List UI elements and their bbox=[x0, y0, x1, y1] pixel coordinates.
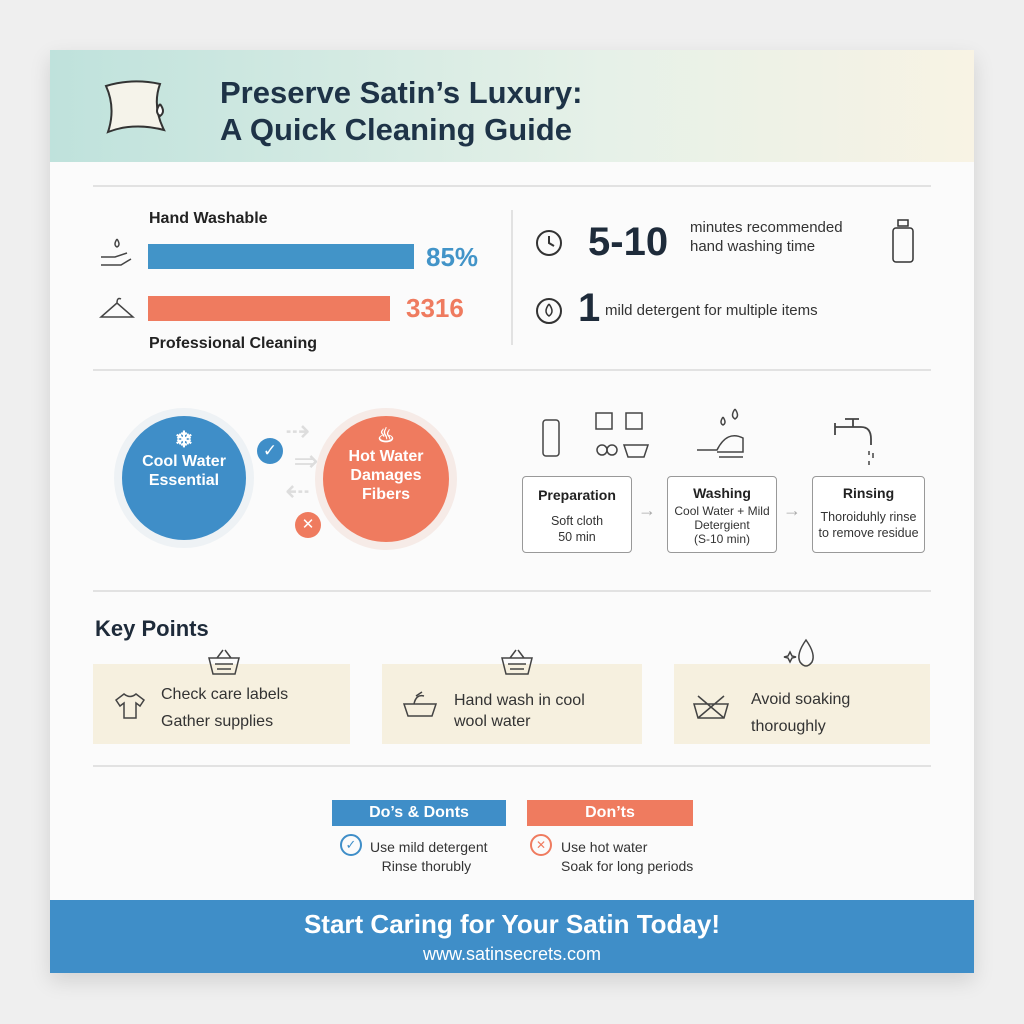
key point 1: Gather supplies bbox=[161, 713, 273, 730]
icon: satin cloth bbox=[104, 80, 166, 134]
icon: bottle bbox=[892, 219, 914, 263]
stats: bars: Hand Washable bbox=[149, 210, 268, 227]
heading: key points: Key Points bbox=[95, 616, 209, 641]
process steps: → bbox=[783, 500, 801, 520]
footer: www.satinsecrets.com bbox=[423, 944, 601, 964]
comparison circles bbox=[114, 408, 457, 550]
step: preparation bbox=[522, 476, 632, 553]
icon: drop bbox=[536, 298, 562, 324]
dos bbox=[332, 800, 506, 874]
header band bbox=[50, 50, 974, 162]
step: rinsing: Thoroiduhly rinse bbox=[821, 510, 916, 524]
stats: numbers bbox=[536, 219, 914, 330]
step: washing: (S-10 min) bbox=[694, 532, 750, 546]
step: rinsing bbox=[812, 476, 925, 553]
stats: bars bbox=[99, 210, 478, 352]
key point 3: Avoid soaking bbox=[751, 691, 850, 708]
dos: Rinse thorubly bbox=[382, 858, 471, 874]
process steps bbox=[522, 408, 925, 553]
key point 3 bbox=[674, 664, 930, 744]
stats: numbers: 1 bbox=[578, 286, 600, 330]
arrows: ⇢ bbox=[285, 415, 310, 448]
icon: x: ✕ bbox=[302, 516, 314, 533]
donts: Use hot water bbox=[561, 839, 647, 855]
arrows: ⇠ bbox=[285, 475, 310, 508]
icon: check: ✓ bbox=[263, 441, 277, 460]
dos: ✓ bbox=[346, 837, 356, 852]
comparison circles: Essential bbox=[149, 472, 219, 489]
stats: numbers: minutes recommended bbox=[690, 219, 843, 236]
footer bbox=[50, 900, 974, 973]
circle: cool water bbox=[114, 408, 254, 548]
process steps: → bbox=[638, 500, 656, 520]
comparison circles: Damages bbox=[350, 467, 422, 484]
donts: Don’ts bbox=[585, 804, 635, 821]
stats: bars: Professional Cleaning bbox=[149, 335, 317, 352]
circle: hot water bbox=[315, 408, 457, 550]
title: A Quick Cleaning Guide bbox=[220, 112, 572, 147]
icon: hanger bbox=[99, 298, 135, 318]
donts bbox=[527, 800, 693, 874]
dos: Do’s & Donts bbox=[369, 804, 469, 821]
key point 2 bbox=[382, 664, 642, 744]
icon: x bbox=[295, 512, 321, 538]
key point 2: Hand wash in cool bbox=[454, 692, 585, 709]
step: rinsing: Rinsing bbox=[843, 485, 894, 501]
step: rinsing: to remove residue bbox=[818, 526, 919, 540]
stats: bars: 3316 bbox=[406, 293, 464, 323]
donts: ✕ bbox=[536, 838, 546, 852]
step: preparation: 50 min bbox=[558, 530, 596, 544]
comparison circles: Fibers bbox=[362, 486, 410, 503]
icons: preparation bbox=[542, 412, 649, 458]
donts: Soak for long periods bbox=[561, 858, 693, 874]
icon: check bbox=[257, 438, 283, 464]
comparison circles: Hot Water bbox=[349, 448, 423, 465]
key point 1: Check care labels bbox=[161, 686, 288, 703]
step: washing: Cool Water + Mild bbox=[674, 504, 770, 518]
comparison circles: Cool Water bbox=[142, 453, 226, 470]
step: preparation: Soft cloth bbox=[551, 514, 603, 528]
stats: numbers: mild detergent for multiple items bbox=[605, 302, 818, 319]
key point 3: thoroughly bbox=[751, 718, 826, 735]
step: washing: Detergient bbox=[694, 518, 750, 532]
step: washing: Washing bbox=[693, 485, 751, 501]
icon: faucet bbox=[834, 418, 874, 465]
dos: Use mild detergent bbox=[370, 839, 488, 855]
footer: Start Caring for Your Satin Today! bbox=[304, 909, 720, 939]
comparison circles: ♨ bbox=[377, 425, 395, 447]
step: washing bbox=[667, 476, 777, 553]
icon: hand bbox=[101, 238, 132, 266]
step: preparation: Preparation bbox=[538, 487, 616, 503]
key point 1 bbox=[93, 664, 350, 744]
icon: hand washing bbox=[697, 408, 744, 458]
stats: numbers: hand washing time bbox=[690, 238, 815, 255]
comparison circles: ❄ bbox=[175, 427, 193, 452]
arrows: ⇒ bbox=[293, 445, 318, 478]
title: Preserve Satin’s Luxury: bbox=[220, 75, 582, 110]
title bbox=[220, 75, 582, 147]
icon: clock bbox=[536, 230, 562, 256]
key point 2: wool water bbox=[454, 713, 530, 730]
stats: bars: 85% bbox=[426, 242, 478, 272]
stats: numbers: 5-10 bbox=[588, 220, 668, 264]
arrows bbox=[285, 415, 318, 508]
